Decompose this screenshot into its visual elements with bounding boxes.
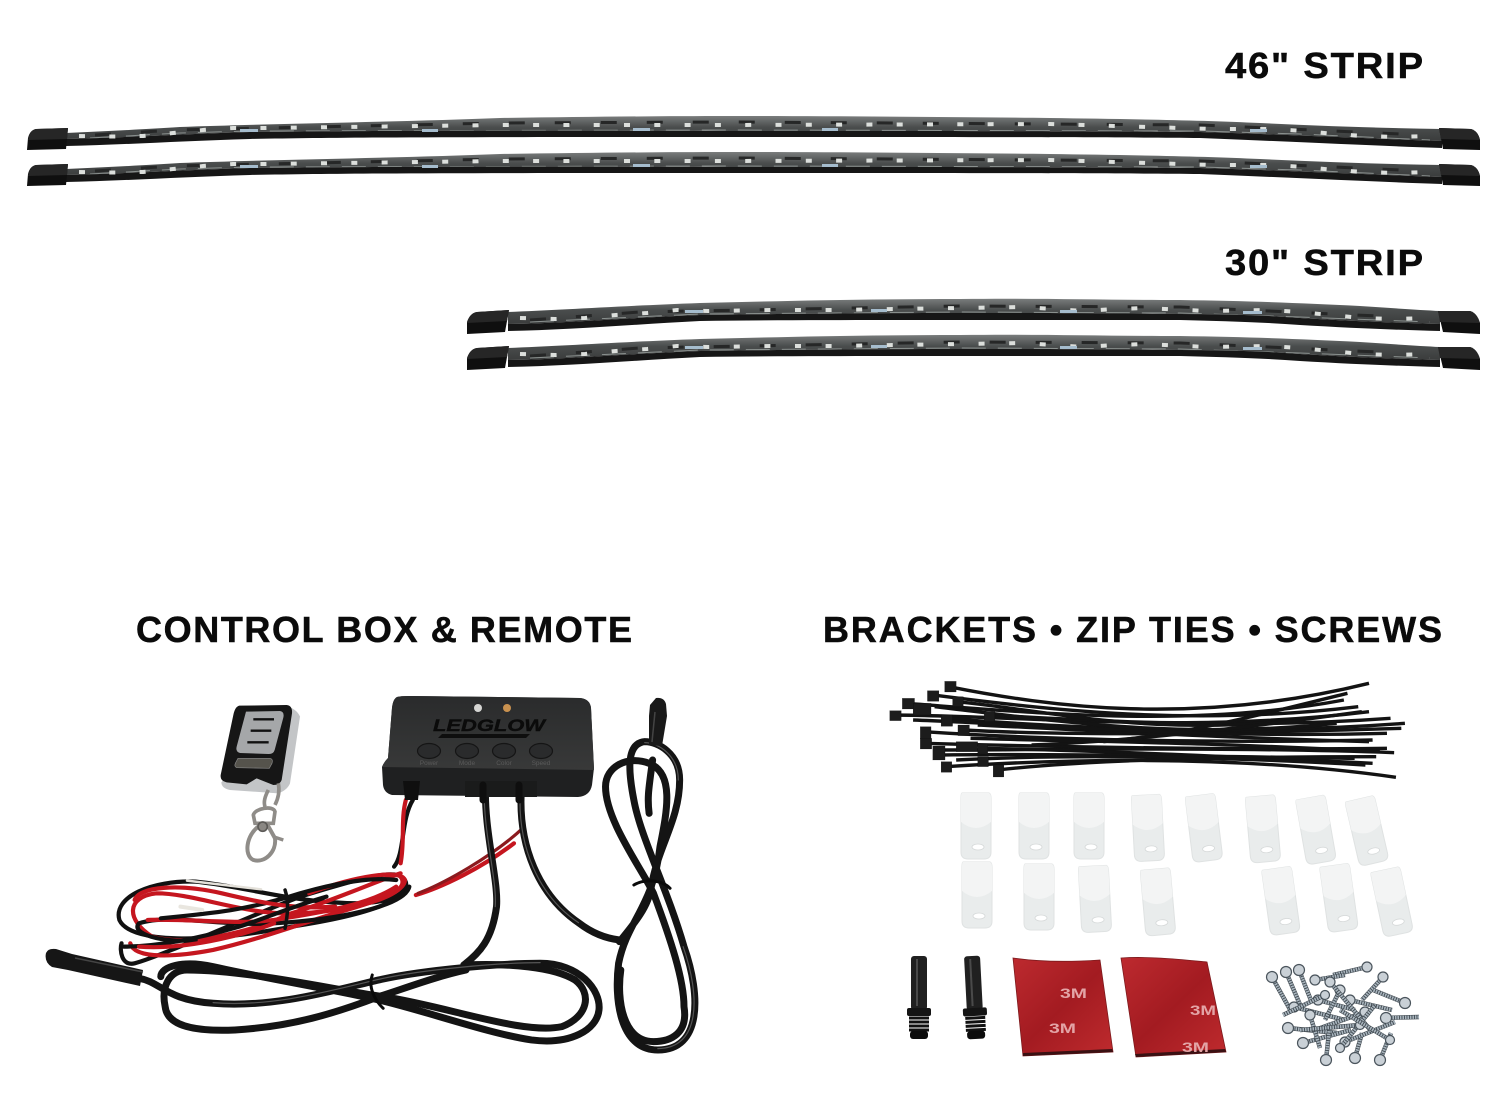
zip tie heads xyxy=(890,681,1004,777)
red and black power lead coil xyxy=(119,800,523,964)
button labels: Power xyxy=(420,760,439,767)
3M adhesive pad, right: 3M xyxy=(1190,1002,1216,1018)
30 inch LED strip, lower xyxy=(467,335,1480,370)
LEDGlow logo: LEDGLOW xyxy=(433,716,548,735)
status LEDs xyxy=(474,704,511,712)
button labels: Speed xyxy=(532,760,551,767)
30 inch LED strip, upper xyxy=(467,299,1480,334)
3M adhesive pad, left: 3M xyxy=(1049,1020,1076,1036)
connector plug: right cable end xyxy=(649,698,667,746)
fob black body xyxy=(221,705,292,785)
3M adhesive pad, left: 3M xyxy=(1060,985,1087,1001)
fob silver side xyxy=(221,707,300,793)
cable from box to right loop xyxy=(520,783,619,940)
control box xyxy=(382,696,594,800)
right cable loop xyxy=(606,742,695,1050)
3M adhesive pad, right: 3M xyxy=(1182,1039,1209,1055)
3M adhesive pad, right xyxy=(1121,957,1226,1057)
connector plug: left cable end xyxy=(46,949,143,986)
46 inch LED strip, lower xyxy=(27,152,1480,186)
adhesive clips, bottom row xyxy=(962,862,1414,937)
cable outlets xyxy=(483,785,519,800)
screws pile xyxy=(1266,962,1419,1066)
remote key fob xyxy=(221,705,300,861)
LEDGlow logo xyxy=(433,716,548,738)
fob badge xyxy=(235,758,272,768)
heading: 30 inch strip: 30" STRIP xyxy=(1225,242,1423,283)
connector caps xyxy=(907,955,988,1040)
zip ties bundle xyxy=(890,681,1405,777)
lower cable loop xyxy=(139,963,599,1041)
fob buttons xyxy=(236,711,284,754)
46 inch LED strip, upper xyxy=(27,116,1480,150)
adhesive clips, top row xyxy=(961,793,1389,867)
key ring and clasp xyxy=(247,783,283,861)
button labels xyxy=(420,760,551,767)
wiring: cables and power leads xyxy=(119,742,695,1050)
control buttons xyxy=(418,744,552,758)
heading: control box and remote: CONTROL BOX & REMOTE xyxy=(136,609,632,650)
cable recess xyxy=(465,781,537,797)
button labels: Color xyxy=(496,760,513,767)
3M adhesive pad, left xyxy=(1013,958,1113,1056)
power socket xyxy=(403,781,420,800)
box top face xyxy=(382,696,594,770)
button labels: Mode xyxy=(459,760,476,767)
cable from box to lower loop xyxy=(464,783,497,965)
heading: 46 inch strip: 46" STRIP xyxy=(1225,45,1423,86)
heading: brackets, zip ties, screws: BRACKETS • ZIP TIES • SCREWS xyxy=(823,609,1442,650)
